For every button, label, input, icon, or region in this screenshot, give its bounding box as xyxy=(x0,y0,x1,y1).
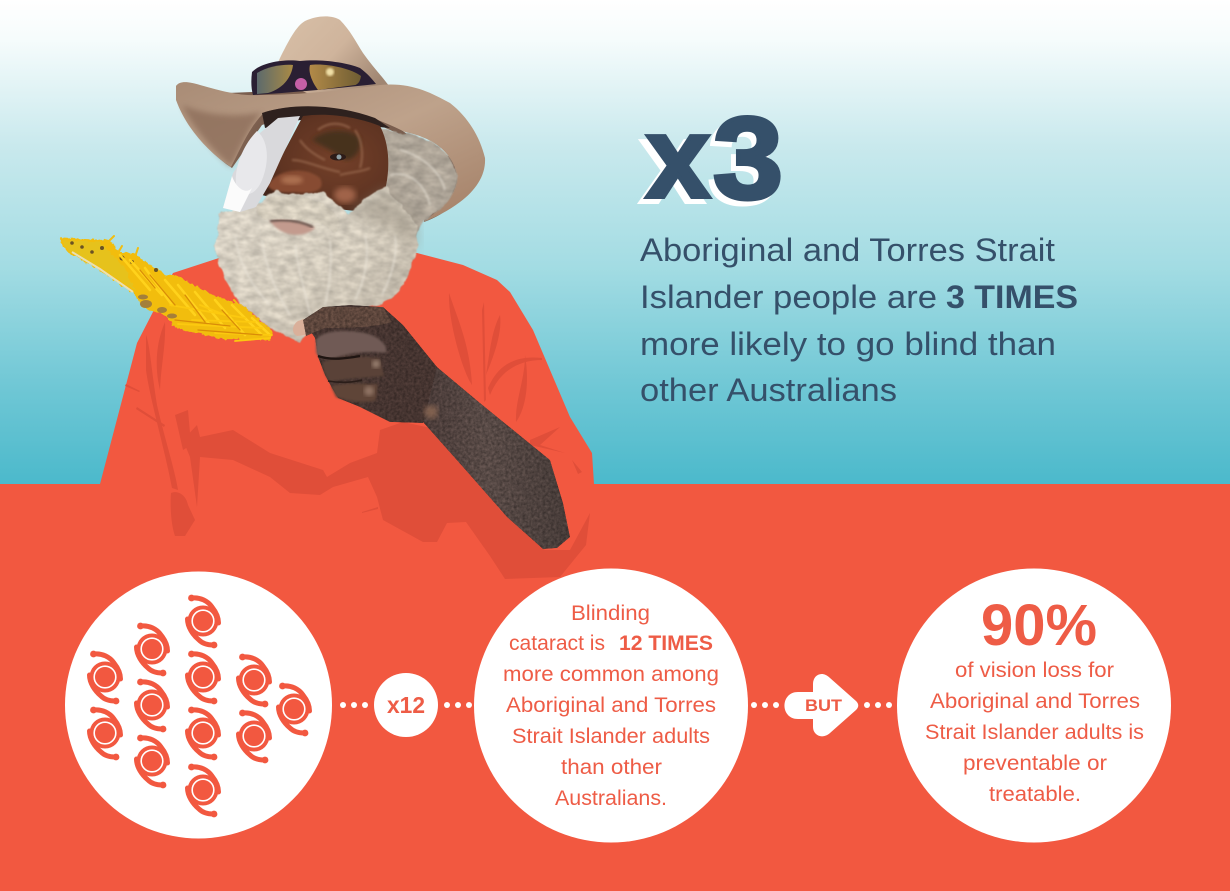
statement: three times more likely: Islander people are xyxy=(640,279,937,315)
connector dots 3 xyxy=(751,702,779,708)
seed pods xyxy=(138,294,177,318)
heading: x3 xyxy=(640,93,783,228)
circle: blinding cataract text: more common among xyxy=(503,662,719,686)
arrow: BUT xyxy=(784,674,858,736)
flower spike xyxy=(62,236,272,341)
circle: blinding cataract text: Strait Islander adults xyxy=(512,724,710,748)
hair strands xyxy=(235,150,445,315)
badge: x12: x12 xyxy=(387,692,425,718)
photo: elder with eye patch and flower xyxy=(62,16,594,579)
circle: blinding cataract text: Aboriginal and Torres xyxy=(506,693,716,717)
x3 dark text: x xyxy=(646,94,710,222)
circle: 90 percent text: Strait Islander adults is xyxy=(925,720,1144,744)
connector dots 2 xyxy=(444,702,472,708)
sunglasses xyxy=(251,60,376,95)
thumb xyxy=(303,307,392,336)
x3 dark text: 3 xyxy=(713,93,783,223)
pale underside xyxy=(72,252,133,292)
badge: x12 xyxy=(374,673,438,737)
wrinkle highlights xyxy=(292,124,370,175)
x3 white shadow: 3 xyxy=(708,98,778,228)
shirt fold shadows xyxy=(125,293,590,579)
statement: three times more likely: more likely to go blind than xyxy=(640,326,1056,362)
circle: blinding cataract text: cataract is xyxy=(509,631,605,655)
face skin xyxy=(262,115,388,212)
x3 white shadow: x xyxy=(640,99,704,227)
arm xyxy=(385,327,570,549)
eye xyxy=(330,154,346,160)
sky gradient background xyxy=(0,0,1230,485)
circle: blinding cataract text xyxy=(474,568,748,842)
x3 dark text xyxy=(646,93,783,223)
hat xyxy=(176,16,485,222)
nose xyxy=(268,171,322,192)
brim left shading xyxy=(182,105,262,167)
circle: 90 percent text: 90% xyxy=(981,593,1097,658)
circle: blinding cataract text: 12 TIMES xyxy=(619,631,713,655)
arrow: BUT: BUT xyxy=(805,696,843,715)
circle: 90 percent text: Aboriginal and Torres xyxy=(930,689,1140,713)
eye patch xyxy=(223,116,300,212)
finger creases xyxy=(318,356,362,382)
ring finger xyxy=(331,384,378,402)
x3 white shadow xyxy=(640,98,778,228)
hat crown xyxy=(262,16,392,100)
connector dots 4 xyxy=(864,702,892,708)
beard shadow right xyxy=(350,187,417,250)
statement: three times more likely: 3 TIMES xyxy=(946,279,1078,315)
circle: blinding cataract text: Australians. xyxy=(555,786,667,810)
statement: three times more likely: Aboriginal and Torres Strait xyxy=(640,232,1055,268)
circle: 90 percent text: treatable. xyxy=(989,782,1081,806)
circle: 90 percent text xyxy=(897,568,1171,842)
brow socket xyxy=(312,131,360,160)
flower tip xyxy=(62,240,135,290)
hat band under brim xyxy=(262,106,390,128)
middle finger xyxy=(323,357,384,382)
hat underside shadow xyxy=(178,90,480,222)
mouth xyxy=(270,220,315,235)
cheek highlight xyxy=(334,187,356,203)
circle: 90 percent text: of vision loss for xyxy=(955,658,1114,682)
circle: blinding cataract text: than other xyxy=(561,755,662,779)
white beard xyxy=(215,187,417,342)
connector dots 1 xyxy=(340,702,368,708)
knuckle highlights xyxy=(372,360,380,368)
hat brim xyxy=(176,82,485,222)
back of hand xyxy=(303,305,437,423)
red shirt xyxy=(100,253,594,520)
coral lower panel xyxy=(0,484,1230,891)
hair on the right of face xyxy=(370,128,457,250)
thumb nail xyxy=(293,319,306,336)
index finger xyxy=(316,331,386,359)
statement: three times more likely xyxy=(640,232,1078,408)
circle: blinding cataract text: Blinding xyxy=(571,601,650,625)
moustache xyxy=(255,195,339,232)
circle: eye icons xyxy=(65,572,332,838)
hand xyxy=(293,305,438,423)
face details xyxy=(268,124,370,203)
circle: 90 percent text: preventable or xyxy=(963,751,1107,775)
statement: three times more likely: other Australians xyxy=(640,372,897,408)
